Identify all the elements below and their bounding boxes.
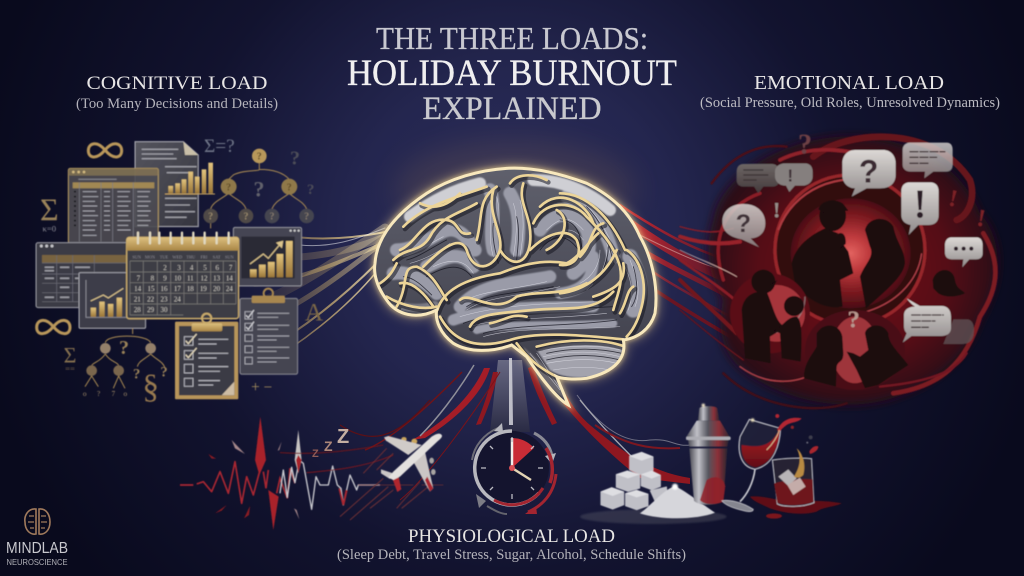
icon: calendar: 17 — [174, 285, 181, 293]
icon: calendar: 12 — [200, 274, 208, 282]
punctuation marks: ! — [773, 197, 780, 222]
icon: calendar: 19 — [200, 285, 207, 293]
heading: physiological load: PHYSIOLOGICAL LOAD — [408, 526, 615, 547]
icon: calendar: 13 — [213, 274, 221, 282]
brain outline — [375, 168, 656, 405]
speech bubble: small question left: ? — [736, 210, 751, 238]
icon: chart card left — [79, 273, 146, 328]
icon: calendar: 3 — [177, 264, 181, 272]
icon: spreadsheet gold — [68, 168, 158, 243]
formula: sigma top left: κ=0 — [43, 223, 56, 233]
icon: document with bar chart — [135, 142, 215, 227]
icon: sleep Zzz: Z — [312, 448, 319, 460]
punctuation marks: ? — [847, 306, 860, 333]
icon: decision tree bottom: ? — [133, 366, 140, 382]
icon: decision tree bottom: o — [83, 389, 87, 398]
ECG spikes — [208, 417, 302, 530]
heading: physiological load: (Sleep Debt, Travel Stress, Sugar, Alcohol, Schedule Shifts) — [337, 547, 686, 563]
icon: calendar: 16 — [160, 285, 168, 293]
punctuation marks: ? — [798, 129, 812, 160]
silhouette: man — [792, 200, 853, 307]
icon: clipboard gold — [175, 314, 238, 399]
icon: calendar: 21 — [134, 296, 141, 304]
heading: emotional load: (Social Pressure, Old Roles, Unresolved Dynamics) — [700, 95, 1000, 111]
heading: cognitive load — [76, 73, 278, 112]
icon: decision tree top: ? — [304, 211, 309, 222]
arrows: gold cognitive streams into brain — [235, 228, 385, 370]
icon: calendar: 14 — [134, 285, 142, 293]
icon: decision tree bottom: ? — [97, 389, 100, 398]
panel: emotional load illustration — [680, 129, 998, 408]
icon: calendar: SUN — [225, 255, 235, 260]
icon: calendar: 18 — [187, 285, 194, 293]
heading: cognitive load: COGNITIVE LOAD — [86, 73, 268, 94]
logo: MindLab Neuroscience: NEUROSCIENCE — [6, 557, 68, 567]
icon: decision tree top: ? — [226, 182, 231, 193]
icon: calendar: 7 — [229, 264, 233, 272]
brain gold sulci — [380, 175, 644, 377]
icon: decision tree bottom — [83, 328, 168, 398]
icon: spreadsheet grey — [36, 243, 133, 308]
speech bubble: large question — [842, 150, 896, 197]
icon: sugar cubes and pile — [580, 452, 727, 524]
title: THE THREE LOADS: — [376, 20, 648, 56]
icon: calendar: 9 — [163, 274, 167, 282]
icon: airplane — [340, 434, 443, 520]
icon: calendar: 24 — [174, 296, 181, 304]
title: EXPLAINED — [422, 91, 602, 127]
icon: wine glass — [722, 414, 802, 512]
icon: letter A: A — [305, 299, 324, 327]
heading: cognitive load: (Too Many Decisions and Details) — [76, 96, 278, 112]
icon: decision tree top — [203, 148, 314, 228]
icon: infinity lower — [37, 320, 70, 334]
glow behind brain — [395, 140, 635, 240]
heading: emotional load: EMOTIONAL LOAD — [754, 73, 944, 94]
speech bubble: large question: ? — [859, 153, 878, 189]
speech bubble: exclamation — [901, 182, 939, 235]
icon: calendar: SUN — [132, 255, 142, 260]
heading: emotional load — [700, 73, 1000, 111]
speech bubble: text lower right — [903, 298, 974, 344]
speech bubble: ellipsis — [945, 237, 983, 267]
title: HOLIDAY BURNOUT — [347, 53, 677, 94]
icon: whisky tumbler with spill — [750, 435, 842, 519]
icon: decision tree top: ? — [307, 182, 314, 198]
emotion orb: central couple — [775, 175, 925, 325]
formula: sigma lower: Σ — [64, 343, 76, 368]
ECG heartbeat line — [180, 417, 393, 530]
icon: calendar: THU — [186, 255, 196, 260]
icon: calendar: 20 — [213, 285, 221, 293]
icon: calendar: TUE — [160, 255, 169, 260]
icon: sleep Zzz: Z — [324, 438, 333, 454]
panel: cognitive load icons — [36, 136, 324, 405]
heading: physiological load — [337, 526, 686, 563]
icon: decision tree top: ? — [243, 211, 248, 222]
speech bubble: dim text — [737, 164, 779, 193]
icon: calendar: 4 — [190, 264, 194, 272]
icon: clock with reversing arrows — [472, 423, 556, 514]
icon: chart card right — [233, 227, 302, 286]
formula: section sign: § — [142, 368, 159, 405]
arrows: red emotional streams into brain — [620, 205, 745, 345]
icon: decision tree top: ? — [269, 211, 274, 222]
icon: decision tree top: ? — [208, 211, 213, 222]
formula: sigma lower: == — [65, 364, 75, 374]
icon: calendar: 10 — [174, 274, 182, 282]
icon: decision tree top: ? — [257, 152, 262, 163]
icon: calendar: 29 — [147, 306, 155, 314]
icon: calendar: 22 — [147, 296, 155, 304]
formula: plus minus: + − — [251, 379, 272, 396]
icon: calendar: 5 — [203, 264, 207, 272]
emotional stream into vortex — [680, 227, 743, 360]
icon: decision tree bottom: ? — [160, 365, 168, 381]
icon: calendar: 30 — [160, 306, 168, 314]
silhouette: woman — [860, 219, 905, 308]
icon: calendar: 8 — [151, 274, 155, 282]
formula: sigma top left: Σ — [40, 192, 59, 228]
icon: sleep Zzz — [312, 426, 349, 460]
logo: MindLab Neuroscience: MINDLAB — [6, 540, 68, 557]
speech bubble: text top right — [903, 143, 953, 178]
icon: calendar: 24 — [226, 285, 233, 293]
icon: calendar: FRI — [201, 255, 208, 260]
icon: decision tree top: ? — [253, 177, 264, 202]
speech bubble: small exclamation: ! — [787, 166, 793, 186]
punctuation marks: ! — [946, 186, 960, 213]
speech bubble: small question left — [722, 204, 765, 247]
punctuation marks: ! — [975, 205, 988, 233]
brain sulci shadow — [382, 178, 645, 379]
speech bubble: small exclamation — [775, 163, 813, 192]
icon: calendar: SAT — [213, 255, 221, 260]
icon: calendar: 6 — [216, 264, 220, 272]
title — [347, 20, 677, 127]
icon: calendar: 28 — [134, 306, 141, 314]
icon: calendar: 2 — [163, 264, 167, 272]
icon: calendar: WED — [172, 255, 182, 260]
punctuation marks — [773, 129, 988, 333]
formula: sigma equals question: Σ=? — [204, 136, 235, 157]
icon: sleep Zzz: Z — [337, 426, 349, 448]
emotion orb: parent and child — [730, 260, 810, 363]
icon: clipboard grey — [240, 289, 298, 374]
logo: MindLab Neuroscience — [6, 509, 68, 567]
icon: calendar: 14 — [226, 274, 233, 282]
arrows: physiological streams into brain — [340, 358, 690, 500]
icon: calendar: 15 — [147, 285, 155, 293]
silhouette: profile right — [933, 270, 965, 296]
icon: decision tree bottom: ? — [119, 337, 129, 359]
icon: calendar: 7 — [137, 274, 141, 282]
logo brain icon — [25, 509, 50, 534]
brain illustration — [375, 168, 656, 405]
icon: decision tree top: ? — [287, 182, 292, 193]
icon: cocktail shaker — [686, 404, 731, 505]
icon: calendar: 11 — [187, 274, 194, 282]
brain gyri shading — [393, 180, 639, 400]
icon: calendar — [127, 233, 239, 319]
icon: infinity top — [88, 144, 122, 157]
icon: decision tree top: ? — [290, 148, 300, 170]
icon: decision tree bottom: o — [123, 389, 127, 398]
icon: calendar: 23 — [160, 296, 168, 304]
brain hatching — [403, 197, 638, 393]
icon: decision tree bottom: 7 — [111, 389, 115, 398]
icon: calendar: MON — [145, 255, 156, 260]
emotion orb: arguing pair — [804, 310, 908, 390]
